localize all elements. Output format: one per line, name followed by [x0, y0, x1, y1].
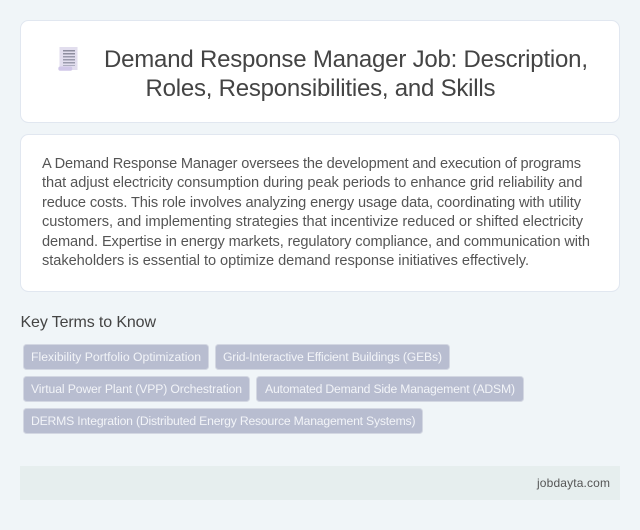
panel: title card [20, 20, 620, 122]
footer [20, 466, 620, 500]
description text: reduce costs. This role involves analyzing energy usage data, coordinating with utility [42, 195, 582, 211]
chip: grid-interactive buildings: Grid-Interactive Efficient Buildings (GEBs) [223, 350, 442, 364]
chip: flexibility portfolio [24, 344, 208, 370]
description text: A Demand Response Manager oversees the development and execution of programs [42, 156, 581, 172]
heading: key terms: Key Terms to Know [20, 314, 156, 331]
chip: automated demand side [256, 376, 524, 402]
footer: jobdayta.com [536, 476, 610, 490]
chip: grid-interactive buildings [216, 344, 450, 370]
key term chips [24, 344, 524, 434]
description text [42, 156, 590, 269]
chip: virtual power plant: Virtual Power Plant (VPP) Orchestration [31, 382, 242, 396]
title: Demand Response Manager Job: Description, [104, 46, 588, 73]
title [104, 46, 588, 102]
chip: DERMS integration [24, 408, 422, 434]
panel: description card [20, 134, 620, 292]
chip: virtual power plant [24, 376, 250, 402]
title: Roles, Responsibilities, and Skills [146, 75, 496, 102]
chip: DERMS integration: DERMS Integration (Distributed Energy Resource Management Systems) [31, 414, 416, 428]
chip: flexibility portfolio: Flexibility Portfolio Optimization [31, 350, 201, 364]
description text: demand. Expertise in energy markets, regulatory compliance, and communication with [42, 234, 590, 250]
description text: that adjust electricity consumption during peak periods to enhance grid reliability and [42, 175, 582, 191]
icon: document scroll [58, 47, 78, 71]
description text: customers, and implementing strategies that incentivize reduced or shifted electricity [42, 214, 584, 230]
description text: stakeholders is essential to optimize demand response initiatives effectively. [42, 253, 529, 269]
chip: automated demand side: Automated Demand Side Management (ADSM) [265, 382, 515, 396]
